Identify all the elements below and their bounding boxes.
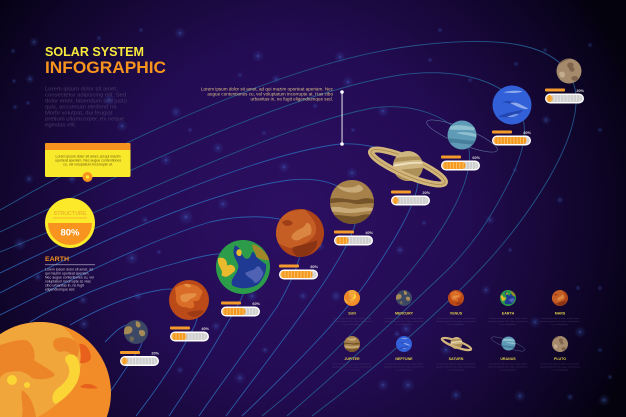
- intro paragraph: quis, accumsan eleifend mi.: [45, 104, 118, 110]
- callout box: Lorem ipsum dolor sit amet, ad qui mazim: [56, 154, 121, 158]
- legend: mars: [540, 290, 580, 326]
- callout box: [45, 143, 130, 182]
- legend: mercury: MERCURY: [395, 312, 414, 316]
- legend: venus: Lorem ipsum dolor sit amet, ad qui mazim: [437, 317, 476, 320]
- bar: pluto: [545, 88, 585, 104]
- earth description: Lorem ipsum dolor sit amet, ad: [45, 268, 93, 272]
- legend: mercury: oporteat aperiam. Nec augue contentiones: [384, 320, 424, 323]
- title: INFOGRAPHIC: [45, 59, 166, 77]
- legend: neptune: [384, 336, 424, 372]
- planet: mars: [276, 209, 324, 257]
- legend: neptune: cu, vel voluptatum.: [395, 368, 413, 372]
- legend: pluto: Lorem ipsum dolor sit amet, ad qui mazim: [541, 362, 580, 366]
- intro paragraph: [45, 86, 128, 128]
- legend: earth: [488, 290, 528, 326]
- legend: uranus: URANUS: [500, 357, 516, 361]
- planet: uranus: [424, 114, 500, 158]
- intro paragraph: Lorem ipsum dolor sit amet,: [45, 86, 118, 92]
- planet: jupiter: [330, 180, 374, 224]
- bar: jupiter: 40%: [365, 231, 374, 235]
- earth description: [45, 256, 95, 292]
- structure gauge: [45, 198, 95, 248]
- bar: uranus: [441, 156, 481, 170]
- legend: venus: [436, 290, 476, 326]
- bar: jupiter: [334, 230, 374, 246]
- earth description: qui mazim oporteat aperiam.: [45, 272, 89, 276]
- legend: jupiter: [332, 336, 372, 372]
- legend: earth: oporteat aperiam. Nec augue contentiones: [488, 320, 528, 323]
- legend: jupiter: JUPITER: [344, 357, 360, 361]
- planet: venus: [169, 280, 209, 320]
- intro paragraph: pretium ullamcorper, ex neque: [45, 116, 125, 122]
- intro paragraph: consectetur adipiscing elit. Sed: [45, 92, 126, 98]
- legend: sun: oporteat aperiam. Nec augue contentiones: [332, 320, 372, 323]
- legend: mars: cu, vel voluptatum.: [551, 323, 569, 326]
- legend: mars: oporteat aperiam. Nec augue contentiones: [540, 320, 580, 323]
- legend: saturn: cu, vel voluptatum.: [447, 368, 465, 372]
- legend: jupiter: cu, vel voluptatum.: [343, 368, 361, 372]
- bar: earth: 60%: [252, 302, 261, 306]
- legend: mercury: Lorem ipsum dolor sit amet, ad qui mazim: [385, 317, 424, 320]
- legend: mars: Lorem ipsum dolor sit amet, ad qui mazim: [541, 317, 580, 320]
- earth description: voluptatum incorrupte at. Has: [45, 280, 91, 284]
- legend: earth: cu, vel voluptatum.: [499, 323, 517, 326]
- legend: earth: EARTH: [502, 312, 515, 316]
- top note: Lorem ipsum dolor sit amet, ad qui mazim oporteat aperiam. Nec: [201, 86, 334, 92]
- legend: uranus: [488, 334, 528, 372]
- planet: mercury: [124, 320, 148, 344]
- legend: uranus: oporteat aperiam. Nec augue contentiones: [488, 366, 528, 368]
- earth description: eligendiumque sed.: [45, 288, 75, 292]
- legend: neptune: Lorem ipsum dolor sit amet, ad qui mazim: [385, 362, 424, 366]
- legend: saturn: SATURN: [449, 357, 464, 361]
- legend: pluto: cu, vel voluptatum.: [551, 368, 569, 372]
- earth description: EARTH: [45, 256, 69, 263]
- bar: pluto: 20%: [576, 89, 585, 93]
- planet: pluto: [556, 58, 582, 84]
- planet: sun: [0, 322, 111, 417]
- bar: mars: 80%: [310, 265, 319, 269]
- legend: sun: SUN: [348, 312, 356, 316]
- bar: venus: 40%: [201, 327, 210, 331]
- legend: sun: [332, 287, 372, 326]
- bar: mercury: [120, 351, 160, 366]
- legend: sun: cu, vel voluptatum.: [343, 323, 361, 326]
- bar: saturn: [391, 190, 431, 206]
- title: [45, 45, 166, 77]
- earth description: cibo urbanitas in, ne fugit: [45, 284, 84, 288]
- bar: mars: [279, 264, 319, 280]
- legend: mercury: cu, vel voluptatum.: [395, 323, 413, 326]
- legend: saturn: Lorem ipsum dolor sit amet, ad qui mazim: [437, 362, 476, 366]
- earth description: Nec augue contentiones cu, vel: [45, 276, 94, 280]
- legend: saturn: oporteat aperiam. Nec augue contentiones: [436, 366, 476, 368]
- title: SOLAR SYSTEM: [45, 45, 144, 59]
- legend: pluto: PLUTO: [554, 357, 566, 361]
- legend: venus: oporteat aperiam. Nec augue contentiones: [436, 320, 476, 323]
- bar: mercury: 20%: [151, 352, 160, 356]
- planet legend: [332, 287, 580, 372]
- bar: earth: [221, 302, 261, 316]
- bar: neptune: [492, 130, 532, 146]
- legend: mars: MARS: [555, 312, 566, 316]
- legend: uranus: cu, vel voluptatum.: [499, 368, 517, 372]
- legend: earth: Lorem ipsum dolor sit amet, ad qui mazim: [489, 317, 528, 320]
- legend: mercury: [384, 290, 424, 326]
- legend: neptune: oporteat aperiam. Nec augue contentiones: [384, 366, 424, 368]
- callout box: oporteat aperiam. Nec augue contentiones: [55, 158, 121, 162]
- top note: urbanitas in, ne fugit eligendiumque sed.: [250, 96, 333, 102]
- structure gauge: STRUCTURE: [54, 211, 87, 217]
- legend: neptune: NEPTUNE: [395, 357, 413, 361]
- bar: saturn: 20%: [422, 191, 431, 195]
- legend: pluto: oporteat aperiam. Nec augue contentiones: [540, 366, 580, 368]
- bar: neptune: 80%: [523, 131, 532, 135]
- legend: venus: VENUS: [450, 312, 463, 316]
- top note: augue contentiones cu, vel voluptatum incorrupte at. Has cibo: [207, 92, 333, 96]
- intro paragraph: egestas elit.: [45, 122, 77, 128]
- legend: jupiter: Lorem ipsum dolor sit amet, ad qui mazim: [333, 362, 372, 366]
- legend: jupiter: oporteat aperiam. Nec augue contentiones: [332, 366, 372, 368]
- bar: uranus: 60%: [472, 156, 481, 160]
- bar: venus: [170, 326, 210, 342]
- vertical marker: [340, 90, 344, 146]
- legend: sun: Lorem ipsum dolor sit amet, ad qui mazim: [333, 317, 372, 320]
- planet: earth: [216, 240, 270, 294]
- legend: venus: cu, vel voluptatum.: [447, 323, 465, 326]
- legend: saturn: [436, 336, 476, 372]
- callout box: cu, vel voluptatum incorrupte at.: [63, 162, 113, 166]
- legend: pluto: [540, 336, 580, 372]
- planet: neptune: [492, 86, 532, 124]
- planet: saturn: [368, 144, 448, 190]
- intro paragraph: Morbi volutpat, dui feugiat: [45, 110, 113, 116]
- top note: [201, 86, 334, 102]
- intro paragraph: dolor enim, bibendum sed justo: [45, 98, 128, 104]
- structure gauge: 80%: [60, 228, 80, 238]
- legend: uranus: Lorem ipsum dolor sit amet, ad qui mazim: [489, 362, 528, 366]
